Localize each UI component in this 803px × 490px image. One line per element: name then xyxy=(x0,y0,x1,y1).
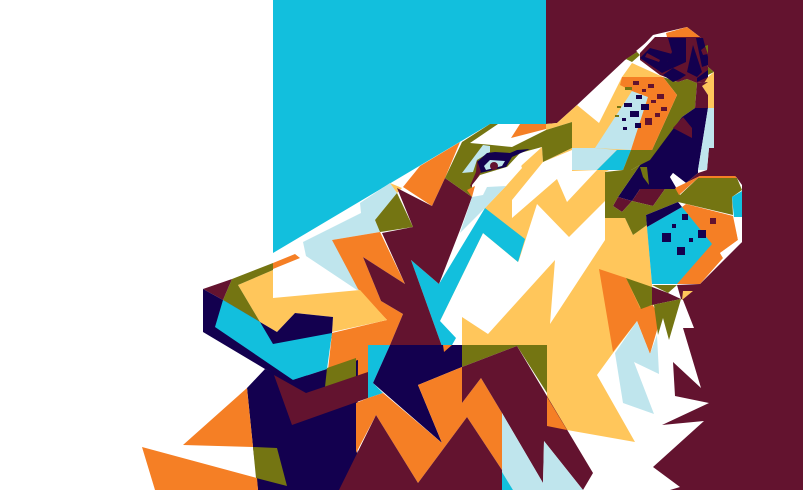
body and snout xyxy=(142,142,653,490)
olive square xyxy=(462,345,547,393)
under-eye light blue xyxy=(460,186,506,233)
light blue throat fur xyxy=(615,321,659,414)
olive back patch xyxy=(375,193,413,232)
yellow snout xyxy=(238,270,387,332)
olive jaw xyxy=(605,165,742,235)
eye outline xyxy=(477,149,530,173)
navy star xyxy=(373,345,462,443)
light blue lip xyxy=(698,108,714,170)
light blue muzzle band xyxy=(572,148,617,170)
lower jaw xyxy=(646,176,742,284)
orange sliver xyxy=(547,397,567,430)
yellow fur tip xyxy=(682,291,693,300)
orange zigzag xyxy=(356,367,502,483)
orange throat xyxy=(599,269,660,354)
navy jaw band xyxy=(646,202,682,227)
light blue back stripe xyxy=(303,183,397,290)
olive nose notch xyxy=(626,52,640,62)
light blue eye patch xyxy=(462,145,490,173)
yellow notch xyxy=(390,183,402,193)
olive fur spikes xyxy=(652,299,681,340)
nose xyxy=(640,37,708,83)
olive throat xyxy=(626,278,652,309)
olive muzzle xyxy=(623,77,697,170)
eye xyxy=(460,145,530,233)
under-eye orange xyxy=(467,186,475,197)
upper muzzle xyxy=(445,27,714,212)
olive chest patch xyxy=(253,447,287,486)
pupil xyxy=(490,162,498,170)
navy chest xyxy=(247,360,358,490)
navy lower snout xyxy=(203,289,333,385)
maroon gum small xyxy=(613,197,632,212)
cyan lip corner xyxy=(732,191,742,217)
maroon gum xyxy=(632,189,665,206)
navy mouth xyxy=(618,108,708,201)
mouth tooth xyxy=(670,173,686,189)
nose navy shapes xyxy=(640,38,714,82)
throat fur xyxy=(599,269,693,414)
whisker dots xyxy=(615,81,667,130)
cyan throat stripe xyxy=(411,208,525,352)
orange lip xyxy=(675,176,737,195)
maroon nose tip xyxy=(203,279,232,300)
maroon nose side xyxy=(695,82,708,108)
yellow nose side xyxy=(702,72,714,108)
maroon fur bottom xyxy=(339,415,502,490)
orange cheek xyxy=(328,232,405,395)
cyan muzzle patch xyxy=(597,150,631,170)
small fang xyxy=(640,167,649,185)
yellow muzzle xyxy=(546,63,663,172)
wolf silhouette xyxy=(142,27,742,490)
olive brow xyxy=(445,122,572,197)
maroon chest band xyxy=(274,372,368,425)
cyan square xyxy=(368,345,390,398)
cyan jaw xyxy=(647,207,712,284)
orange snout strip xyxy=(273,254,300,269)
neck yellow mass xyxy=(440,147,653,442)
maroon palate xyxy=(673,117,692,138)
light blue fur xyxy=(502,413,583,490)
olive under jaw xyxy=(652,285,677,293)
orange forehead xyxy=(403,142,460,206)
maroon throat xyxy=(652,287,681,305)
white nose stripe xyxy=(636,33,667,53)
olive snout xyxy=(223,263,273,322)
jaw dots xyxy=(662,214,716,255)
under-eye white xyxy=(472,163,522,197)
orange brow mark xyxy=(511,124,546,138)
orange triangle xyxy=(183,388,253,447)
olive jaw patch xyxy=(325,358,356,387)
upper white fur xyxy=(512,150,597,218)
orange tip xyxy=(443,345,452,352)
light blue whisker patch xyxy=(595,91,648,150)
maroon eye line xyxy=(470,160,481,187)
orange wedge xyxy=(142,447,258,490)
lower white fur xyxy=(440,201,605,345)
orange whisker patch xyxy=(620,77,677,150)
orange jaw xyxy=(652,204,738,284)
eye white xyxy=(484,160,505,170)
white jaw edge xyxy=(720,217,742,258)
maroon neck xyxy=(363,178,472,352)
orange nose top xyxy=(666,27,700,37)
maroon fur right xyxy=(462,346,593,490)
cyan fur corner xyxy=(502,472,513,490)
cyan snout xyxy=(215,300,332,380)
